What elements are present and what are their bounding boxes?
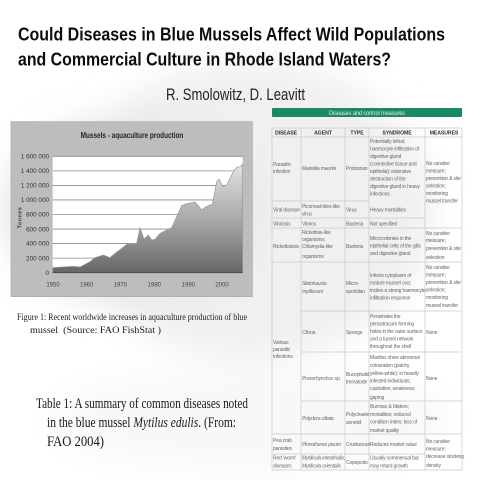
table header row: TYPE <box>350 130 364 136</box>
row: red worm diseases: Copepods <box>346 460 368 466</box>
row: viral disease: Picornavirides-like <box>302 204 340 210</box>
row: prosorhynchus: gaping <box>370 395 384 401</box>
row: rickettsiosis: and digestive gland <box>370 251 411 257</box>
title: and Commercial Culture in Rhode Island Waters? <box>18 50 391 70</box>
row: parasitic infection: selection; <box>426 184 446 190</box>
row: viral disease: Virus <box>346 208 357 214</box>
row: parasitic infection: mussel transfer <box>426 198 458 204</box>
table caption: in the blue mussel Mytilus edulis. (From: <box>47 415 236 431</box>
row: parasitic infection: Marteilia maurini <box>302 166 337 172</box>
figure caption <box>17 312 247 336</box>
x axis labels: 1980 <box>148 283 162 289</box>
row: steinhausia: infiltration response <box>370 296 411 302</box>
table header row: DISEASE <box>275 130 298 136</box>
row: parasitic infection: No curative <box>426 161 450 167</box>
row: pea crab parasites: decrease stocking <box>426 454 464 460</box>
row: rickettsiosis: No curative <box>426 231 450 237</box>
row: parasitic infection: haemocyte infiltration of <box>370 146 420 152</box>
row: rickettsiosis: measure; <box>426 238 446 244</box>
row: rickettsiosis: organisms; <box>302 237 325 243</box>
y axis labels: 1 600 000 <box>21 153 49 160</box>
row: prosorhynchus: colouration (patchy <box>370 363 410 369</box>
row: parasitic infection: digestive gland <box>370 154 401 160</box>
row: parasitic infection: digestive gland in heavy <box>370 184 420 190</box>
y axis labels: 1 400 000 <box>21 168 49 175</box>
area series <box>53 164 243 273</box>
row: various parasitic infections, cliona <box>273 314 438 360</box>
y axis labels: 200 000 <box>26 255 49 262</box>
row: viral disease: virus <box>302 212 312 218</box>
row: prosorhynchus: infected individuals; <box>370 378 410 384</box>
y axis labels: 400 000 <box>26 241 49 248</box>
row: prosorhynchus: castration; weakness; <box>370 386 415 392</box>
row: rickettsiosis: Bacteria <box>346 244 364 250</box>
row: prosorhynchus: yellow-white); in heavily <box>370 371 419 377</box>
row: rickettsiosis: prevention & site <box>426 246 461 252</box>
row: red worm diseases: Red 'worm' <box>273 456 296 462</box>
row: steinhausia: mature mussel ova; <box>370 280 411 286</box>
row: various parasitic infections, cliona: parasitic <box>273 347 291 353</box>
y axis labels: 800 000 <box>26 212 49 219</box>
y axis labels: 0 <box>45 270 49 277</box>
row: pea crab parasites: Pea crab <box>273 438 292 444</box>
row: parasitic infection: prevention & site <box>426 176 461 182</box>
row: steinhausia: No curative <box>426 265 450 271</box>
y axis labels: 1 000 000 <box>21 197 49 204</box>
row: pea crab parasites: Pinnotheres pisum <box>302 442 341 448</box>
row: parasitic infection: destruction of the <box>370 176 406 182</box>
table banner <box>272 108 462 117</box>
row: steinhausia: sporidian <box>346 289 365 295</box>
row: steinhausia: measure; <box>426 272 446 278</box>
row: red worm diseases: Mytilicola orientalis <box>302 464 341 470</box>
figure caption: Figure 1: Recent worldwide increases in aquaculture production of blue <box>17 312 247 323</box>
row: prosorhynchus <box>302 355 438 401</box>
table caption <box>36 396 249 450</box>
authors: R. Smolowitz, D. Leavitt <box>166 85 305 104</box>
row: rickettsiosis <box>273 230 461 261</box>
table banner: Diseases and control measures <box>329 110 405 117</box>
row: various parasitic infections, cliona: Penetrates the <box>370 314 401 320</box>
row: steinhausia: mytilovum <box>302 289 323 295</box>
row: pea crab parasites: density <box>426 463 441 469</box>
row: various parasitic infections, cliona: None <box>426 330 438 336</box>
row: red worm diseases: may retard growth <box>370 464 408 470</box>
row: steinhausia: mussel transfer <box>426 303 458 309</box>
row: parasitic infection: (connective tissue and <box>370 162 417 168</box>
row: pea crab parasites: parasites <box>273 446 293 452</box>
row: steinhausia: monitoring <box>426 295 448 301</box>
table grid <box>272 128 462 470</box>
row: polydora: mortalities; reduced <box>370 412 411 418</box>
x axis labels: 1950 <box>46 283 60 289</box>
row: various parasitic infections, cliona: periostracum forming <box>370 322 414 328</box>
y axis labels: 600 000 <box>26 226 49 233</box>
y axis labels: 1 200 000 <box>21 183 49 190</box>
row: pea crab parasites: measure; <box>426 446 446 452</box>
row: prosorhynchus: None <box>426 376 438 382</box>
row: rickettsiosis: Chlamydia-like <box>302 244 333 250</box>
row: polydora: None <box>426 416 438 422</box>
row: various parasitic infections, cliona: holes in the outer surface <box>370 329 423 335</box>
row: steinhausia: incites a strong haemocyte <box>370 288 426 294</box>
row: rickettsiosis: selection <box>426 255 445 261</box>
chart heading: Mussels - aquaculture production <box>81 131 183 140</box>
row: vibriosis: Bacteria <box>346 222 364 228</box>
table header row: MEASURES <box>430 130 459 136</box>
row: prosorhynchus: trematode <box>346 380 368 386</box>
figure caption: mussel (Source: FAO FishStat ) <box>30 325 161 336</box>
row: steinhausia: Infects cytoplasm of <box>370 273 412 279</box>
table header row: SYNDROME <box>382 130 412 136</box>
x axis labels: 2000 <box>215 283 229 289</box>
row: polydora: Polychaete <box>346 412 370 418</box>
row: polydora: market quality <box>370 428 400 434</box>
row: vibriosis: Vibrios <box>302 222 317 228</box>
row: various parasitic infections, cliona: and a tunnel network <box>370 336 414 342</box>
table caption: Table 1: A summary of common diseases noted <box>36 396 249 412</box>
row: rickettsiosis: Rickettsia-like <box>302 230 331 236</box>
row: polydora: annelid <box>346 420 361 426</box>
row: rickettsiosis: Microcolonies in the <box>370 236 412 242</box>
row: pea crab parasites <box>273 438 464 469</box>
row: parasitic infection: Potentially lethal; <box>370 139 405 145</box>
row: steinhausia: Micro- <box>346 281 359 287</box>
y axis labels <box>21 153 49 277</box>
row: steinhausia: selection; <box>426 288 446 294</box>
row: parasitic infection: monitoring <box>426 191 448 197</box>
row: various parasitic infections, cliona: Sponge <box>346 330 363 336</box>
row: prosorhynchus: Prosorhynchus sp. <box>302 376 341 382</box>
chart panel background <box>11 122 252 297</box>
row: vibriosis: Vibriosis <box>273 222 291 228</box>
row: red worm diseases: Mytilicola intestinalis; <box>302 456 346 462</box>
x axis labels: 1970 <box>114 283 128 289</box>
row: polydora: Burrows & blisters; <box>370 404 409 410</box>
row: prosorhynchus: Bucephalid <box>346 372 370 378</box>
x axis labels: 1960 <box>80 283 94 289</box>
row: viral disease <box>273 204 406 218</box>
row: steinhausia: Steinhausia <box>302 281 327 287</box>
row: vibriosis: Not specified <box>370 222 397 228</box>
row: pea crab parasites: Reduces market value <box>370 442 417 448</box>
row: pea crab parasites: Crustacean <box>346 442 370 448</box>
row: parasitic infection: Parasitic <box>273 162 291 168</box>
row: rickettsiosis: epithelial cells of the gills <box>370 244 421 250</box>
row: various parasitic infections, cliona: infections <box>273 354 293 360</box>
row: various parasitic infections, cliona: Cliona <box>302 330 316 336</box>
chart: mussels aquaculture production <box>11 122 252 297</box>
row: parasitic infection: Protozoan <box>346 166 368 172</box>
row: parasitic infection: epithelia); extensive <box>370 169 411 175</box>
y axis title: Tonnes <box>17 207 23 228</box>
row: rickettsiosis: Rickettsiosis <box>273 244 299 250</box>
row: prosorhynchus: Mantles show abnormal <box>370 355 420 361</box>
row: rickettsiosis: organisms <box>302 254 324 260</box>
title <box>18 24 445 70</box>
x axis labels <box>46 283 229 289</box>
row: parasitic infection <box>273 139 461 204</box>
row: vibriosis <box>273 222 397 228</box>
row: polydora: condition index; loss of <box>370 420 418 426</box>
plot area <box>53 156 243 273</box>
row: polydora: Polydora ciliata <box>302 416 334 422</box>
table header row <box>275 130 459 136</box>
table header row: AGENT <box>314 130 333 136</box>
row: various parasitic infections, cliona: throughout the shell <box>370 344 411 350</box>
row: steinhausia: prevention & site <box>426 280 461 286</box>
x axis labels: 1990 <box>182 283 196 289</box>
row: viral disease: Viral disease <box>273 208 300 214</box>
row: red worm diseases <box>273 456 419 470</box>
table caption: FAO 2004) <box>47 434 104 450</box>
row: steinhausia <box>302 265 461 309</box>
row: parasitic infection: infections <box>370 192 390 198</box>
row: red worm diseases: Usually commensal but <box>370 456 419 462</box>
row: pea crab parasites: No curative <box>426 439 450 445</box>
row: parasitic infection: measure; <box>426 168 446 174</box>
row: parasitic infection: infection <box>273 169 291 175</box>
disease table <box>272 108 464 470</box>
row: polydora <box>302 404 438 434</box>
row: viral disease: Heavy mortalities <box>370 208 406 214</box>
row: red worm diseases: diseases <box>273 464 292 470</box>
row: various parasitic infections, cliona: Various <box>273 340 289 346</box>
